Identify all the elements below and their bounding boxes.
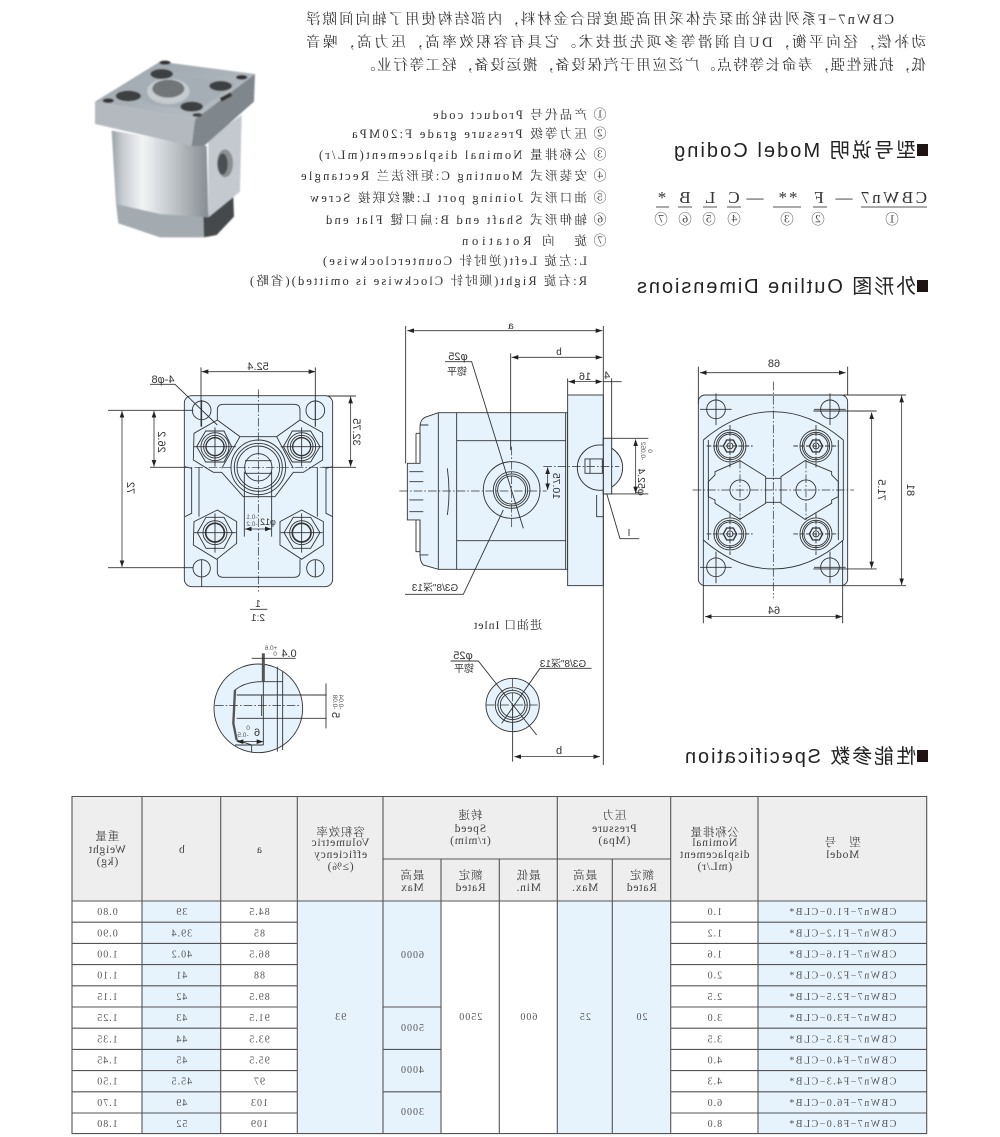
model coding legend list: ① bbox=[593, 107, 607, 122]
table header labels: 额定 bbox=[458, 868, 483, 882]
table data rows: 86.5 bbox=[248, 950, 270, 960]
table header labels: displacement bbox=[679, 849, 750, 861]
table data rows: 2.5 bbox=[707, 992, 722, 1003]
table data rows: 85 bbox=[253, 928, 265, 939]
table data rows: 2.0 bbox=[707, 971, 722, 982]
model coding legend list: ⑥ bbox=[593, 212, 607, 227]
table merged values: 6000 bbox=[400, 950, 424, 961]
table data rows: CBWn7−F8.0−CLB* bbox=[788, 1119, 896, 1130]
model coding legend list: 产品代号 Product code bbox=[433, 107, 587, 122]
table header labels: efficiency bbox=[313, 849, 367, 861]
table data rows: 3.5 bbox=[707, 1034, 722, 1045]
detail: shaft key bbox=[214, 645, 344, 753]
model code breakdown: ③ bbox=[780, 212, 794, 227]
model coding legend list: 油口形式 Joining port L:螺纹联接 Screw bbox=[310, 190, 587, 205]
drawing: front view: 72 bbox=[124, 482, 136, 494]
detail: inlet port: 锪平 bbox=[454, 662, 474, 675]
table data rows: 0.80 bbox=[96, 907, 118, 918]
table header labels: 压力 bbox=[602, 808, 626, 822]
table header labels: Weight bbox=[88, 844, 126, 856]
detail: shaft key: 0 bbox=[246, 725, 250, 732]
model coding legend list: ⑦ bbox=[593, 233, 607, 248]
drawing: front view: 4-φ8 bbox=[151, 374, 175, 386]
table header labels: Pressure bbox=[591, 823, 637, 835]
model code breakdown: * bbox=[658, 188, 666, 207]
table data rows: 103 bbox=[250, 1098, 268, 1109]
table data rows: 43 bbox=[175, 1013, 187, 1024]
table data rows: 1.2 bbox=[707, 928, 722, 939]
model code breakdown: ② bbox=[811, 212, 825, 227]
table header labels: 最高 bbox=[572, 868, 597, 882]
model coding legend list: ④ bbox=[593, 168, 607, 183]
table header labels: Max. bbox=[571, 882, 598, 894]
model code breakdown: ⑦ bbox=[654, 212, 668, 227]
table header labels: Rated bbox=[626, 882, 657, 894]
table merged values: 20 bbox=[636, 1012, 648, 1023]
table data rows: 39.4 bbox=[171, 928, 192, 939]
table merged values bbox=[334, 950, 648, 1118]
detail: shaft key: 6 bbox=[254, 727, 260, 739]
table header labels: Volumetric bbox=[311, 837, 370, 849]
table data rows: 1.0 bbox=[707, 907, 722, 918]
table data rows: CBWn7−F2.0−CLB* bbox=[788, 971, 896, 982]
heading: outline dimensions: 外形图 Outline Dimensions bbox=[637, 275, 916, 298]
drawing: side view bbox=[399, 321, 653, 765]
model coding legend list: L:左旋 Left(逆时针 Counterclockwise) bbox=[323, 253, 587, 268]
table data rows: 45.5 bbox=[171, 1077, 192, 1088]
drawing: side view: 16 bbox=[579, 371, 591, 383]
table header labels: (≥%) bbox=[327, 861, 354, 873]
table: specification bbox=[72, 796, 927, 1134]
model code breakdown: ** bbox=[776, 188, 798, 207]
table header labels: 型 号 bbox=[824, 835, 861, 849]
table data rows: 93.5 bbox=[248, 1034, 270, 1045]
table header labels: 最低 bbox=[516, 869, 541, 882]
model code breakdown: — bbox=[746, 188, 764, 207]
table data rows: 40.2 bbox=[171, 950, 192, 960]
drawing: front view: 26.2 bbox=[155, 431, 167, 453]
table header labels: Rated bbox=[455, 882, 486, 894]
drawing: rear view: 64 bbox=[768, 605, 780, 617]
table data rows: 41 bbox=[175, 971, 187, 982]
drawing: side view: 4 bbox=[604, 370, 610, 382]
detail: shaft key: 0 bbox=[273, 651, 277, 658]
table header labels: Speed bbox=[454, 823, 486, 835]
table header labels: a bbox=[256, 844, 262, 856]
table merged values: 2500 bbox=[458, 1012, 482, 1023]
table header labels: 转速 bbox=[458, 808, 482, 822]
model coding legend list: ⑤ bbox=[593, 190, 607, 205]
drawing: front view: -0.1 bbox=[246, 514, 258, 521]
table data rows: 4.0 bbox=[707, 1056, 722, 1066]
table data rows: CBWn7−F4.0−CLB* bbox=[788, 1056, 896, 1066]
model code breakdown: L bbox=[705, 188, 715, 207]
table data rows: CBWn7−F1.6−CLB* bbox=[788, 950, 896, 960]
drawing: side view: 10.75 bbox=[550, 473, 562, 499]
detail: inlet port: φ25 bbox=[453, 650, 473, 662]
table data rows: 89.5 bbox=[248, 992, 270, 1003]
table data rows: 44 bbox=[175, 1034, 187, 1045]
table data rows: 0.90 bbox=[96, 928, 118, 939]
model code breakdown: F bbox=[814, 188, 824, 207]
table data rows: 45 bbox=[175, 1056, 187, 1066]
model coding legend list: 安装形式 Mounting C:矩形法兰 Rectangle bbox=[301, 168, 587, 183]
table data rows: CBWn7−F3.5−CLB* bbox=[788, 1034, 896, 1045]
table header labels: Nominal bbox=[691, 837, 737, 849]
table data rows: 84.5 bbox=[248, 907, 270, 918]
table data rows: 1.15 bbox=[96, 992, 118, 1003]
table merged values: 25 bbox=[579, 1012, 591, 1023]
model coding legend list: 旋 向 Rotation bbox=[461, 233, 587, 248]
table data rows: 4.3 bbox=[707, 1077, 722, 1088]
table data rows: 52 bbox=[175, 1119, 187, 1130]
detail: inlet port bbox=[451, 650, 600, 762]
drawing: side view: 0 bbox=[646, 449, 653, 453]
table data rows: 8.0 bbox=[707, 1119, 722, 1130]
model coding legend list: ③ bbox=[593, 147, 607, 162]
model code breakdown: — bbox=[834, 188, 854, 207]
drawing: side view: -0.052 bbox=[639, 441, 646, 460]
table data rows: 1.6 bbox=[707, 950, 722, 960]
table data rows: 91.5 bbox=[248, 1013, 270, 1024]
table data rows: CBWn7−F1.0−CLB* bbox=[788, 907, 896, 918]
drawing: front view: -0.2 bbox=[246, 521, 258, 528]
table header labels: (r/mim) bbox=[449, 835, 491, 847]
table data rows: 39 bbox=[175, 907, 187, 918]
detail: shaft key: 5 bbox=[329, 712, 341, 718]
table data rows: CBWn7−F3.0−CLB* bbox=[788, 1013, 896, 1024]
table data rows: 1.35 bbox=[96, 1034, 118, 1045]
drawing: rear view bbox=[693, 358, 916, 623]
drawing: side view: I bbox=[628, 528, 630, 539]
table data rows: 1.50 bbox=[96, 1077, 118, 1088]
product photo: gear pump bbox=[95, 61, 255, 237]
detail: inlet port: G3/8"深13 bbox=[539, 658, 586, 670]
table merged values: 93 bbox=[334, 1012, 346, 1023]
table data rows: 3.0 bbox=[707, 1013, 722, 1024]
table data rows: 1.25 bbox=[96, 1013, 118, 1024]
table data rows: 97 bbox=[253, 1077, 265, 1088]
drawing: front view: φ12 bbox=[260, 517, 276, 527]
table header labels: b bbox=[178, 844, 185, 856]
table header labels: (kg) bbox=[96, 856, 118, 868]
detail: shaft key: 0.4 bbox=[281, 648, 297, 660]
table merged values: 4000 bbox=[400, 1065, 424, 1076]
detail: shaft key: -0.04 bbox=[337, 694, 344, 709]
model coding legend list: 压力等级 Pressure grade F:20MPa bbox=[352, 126, 587, 141]
table data rows: 1.00 bbox=[96, 950, 118, 960]
table data rows: 1.45 bbox=[96, 1056, 118, 1066]
table header labels bbox=[88, 808, 861, 894]
model coding legend list: 公称排量 Nominal displacement(mL/r) bbox=[319, 147, 587, 162]
heading: specification: 性能参数 Specification bbox=[685, 745, 916, 768]
detail: shaft key: -0.08 bbox=[331, 694, 338, 709]
caption: inlet: 进油口 Inlet bbox=[473, 617, 542, 632]
table header labels: (Mpa) bbox=[598, 835, 630, 847]
model coding legend list: 轴伸形式 Shaft end B:扁口键 Flat end bbox=[325, 212, 587, 227]
table data rows: CBWn7−F6.0−CLB* bbox=[788, 1098, 896, 1109]
intro paragraph: 动补偿，径向平衡，DU自润滑等多项先进技术。它具有容积效率高，压力高，噪音 bbox=[306, 33, 926, 51]
drawing: side view: G3/8"深13 bbox=[411, 582, 458, 594]
drawing: front view: 2:1 bbox=[251, 613, 265, 624]
drawing: front view: 1 bbox=[255, 599, 261, 610]
model code breakdown: CBWn7 bbox=[860, 188, 927, 207]
table data rows: 42 bbox=[175, 992, 187, 1003]
table data rows: 49 bbox=[175, 1098, 187, 1109]
table data rows: CBWn7−F4.3−CLB* bbox=[788, 1077, 896, 1088]
table header labels: 最高 bbox=[400, 868, 424, 882]
intro paragraph: CBWn7−F系列齿轮油泵壳体采用高强度铝合金材料，内部结构使用了轴向间隙浮 bbox=[306, 10, 894, 28]
table header labels: Model bbox=[825, 849, 859, 861]
table header labels: 额定 bbox=[629, 868, 654, 882]
table data rows bbox=[96, 907, 896, 1130]
table data rows: 95.5 bbox=[248, 1056, 270, 1066]
table data rows: 6.0 bbox=[707, 1098, 722, 1109]
model code breakdown: ⑥ bbox=[678, 212, 692, 227]
model code breakdown: C bbox=[728, 188, 740, 207]
model coding legend list: ② bbox=[593, 126, 607, 141]
model code breakdown: ⑤ bbox=[702, 212, 716, 227]
detail: shaft key: -0.5 bbox=[237, 732, 249, 739]
drawing: side view: b bbox=[556, 347, 562, 358]
drawing: side view: φ52.4 bbox=[635, 468, 647, 496]
model code breakdown: ④ bbox=[727, 212, 741, 227]
detail: inlet port: b bbox=[556, 745, 562, 757]
table merged values: 3000 bbox=[400, 1107, 424, 1118]
table data rows: CBWn7−F2.5−CLB* bbox=[788, 992, 896, 1003]
table header labels: Min. bbox=[516, 882, 541, 894]
model code breakdown: B bbox=[679, 188, 691, 207]
detail: shaft key: +0.6 bbox=[264, 645, 277, 652]
table header labels: 重量 bbox=[95, 829, 119, 843]
table data rows: 1.10 bbox=[96, 971, 118, 982]
model coding legend list: R:右旋 Right(顺时针 Clockwise is omitted)(省略) bbox=[250, 273, 587, 288]
drawing: front view: 32.75 bbox=[350, 418, 362, 446]
table data rows: 1.70 bbox=[96, 1098, 118, 1109]
intro paragraph: 低，抗振性强，寿命长等特点。广泛应用于汽保设备，搬运设备，轻工等行业。 bbox=[361, 56, 926, 74]
table merged values: 600 bbox=[519, 1012, 537, 1023]
model coding legend list bbox=[250, 107, 607, 288]
drawing: rear view: 71.5 bbox=[875, 479, 887, 501]
table data rows: 109 bbox=[250, 1119, 268, 1130]
heading: model coding: 型号说明 Model Coding bbox=[674, 139, 916, 162]
table merged values: 5000 bbox=[400, 1023, 424, 1034]
model code breakdown bbox=[654, 188, 927, 227]
intro paragraph bbox=[306, 10, 926, 74]
table header labels: Max bbox=[400, 882, 424, 894]
table data rows: 1.80 bbox=[96, 1119, 118, 1130]
drawing: side view: a bbox=[508, 321, 514, 332]
drawing: rear view: 68 bbox=[768, 358, 780, 370]
table data rows: CBWn7−F1.2−CLB* bbox=[788, 928, 896, 939]
drawing: front view: 52.4 bbox=[247, 361, 269, 373]
drawing: side view: φ25 bbox=[448, 351, 468, 363]
drawing: side view: 锪平 bbox=[447, 365, 467, 378]
model code breakdown: ① bbox=[885, 212, 899, 227]
drawing: front view bbox=[108, 361, 362, 624]
table header labels: (mL/r) bbox=[697, 861, 732, 873]
table header labels: 公称排量 bbox=[690, 825, 739, 839]
table header labels: 容积效率 bbox=[316, 825, 365, 839]
table data rows: 88 bbox=[253, 971, 265, 982]
drawing: rear view: 81 bbox=[904, 484, 916, 496]
